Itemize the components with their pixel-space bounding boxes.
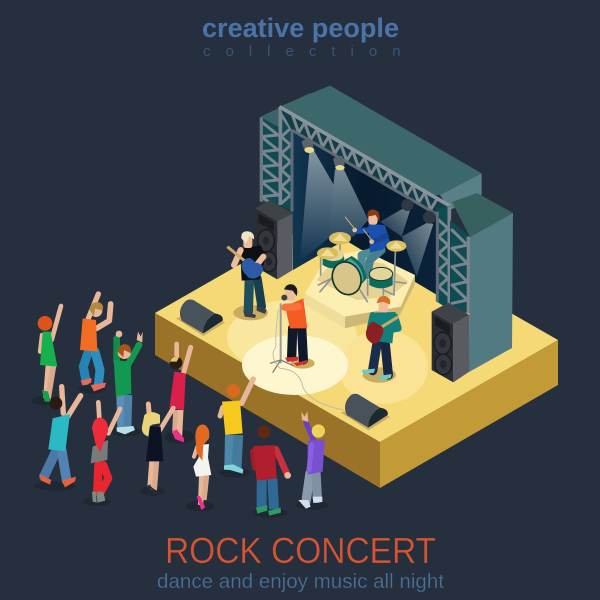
subtitle: dance and enjoy music all night [157,571,444,593]
speaker stack left [255,200,293,279]
dancer: white dress [186,425,214,511]
crowd back group [32,294,194,506]
roof block [279,86,482,210]
horizontal truss [279,107,450,214]
stage monitor right [341,394,390,430]
stage monitor left [176,299,225,336]
drum riser [305,250,415,328]
stage platform [155,211,558,488]
dancer: teal shirt [34,387,81,491]
dancer: green dress [32,306,61,405]
dancer: yellow shirt [219,379,253,477]
right side column [450,220,470,313]
drummer [345,210,390,275]
light beams [300,151,433,277]
backdrop wall [292,130,437,295]
back tower left [260,93,340,140]
heading: creative people collection: creative people [202,13,399,43]
dancer: red dress [164,344,194,443]
large speaker right [432,303,469,382]
dancer: black dress [140,404,173,496]
left back column [260,117,279,211]
singer with microphone [270,284,315,373]
heading: creative people collection [202,13,416,60]
cymbals [317,232,406,259]
stage spotlights [227,300,428,404]
left front column [279,107,293,212]
title: rock concert: ROCK CONCERT [165,530,436,571]
microphone cable [273,310,343,410]
dancer: purple sweater [296,411,328,510]
drum stands [318,243,406,302]
right tower [452,193,513,372]
crowd front group [186,379,328,518]
floor tom [369,267,393,288]
stage performers and monitors [176,231,469,430]
right guitarist [362,296,398,383]
right front column [437,206,450,310]
snare [323,249,344,268]
truss frame [260,107,470,313]
kick drum [327,256,367,299]
dancer: orange shirt [78,294,111,393]
dancer: red hair [83,402,120,506]
heading: creative people collection: collection [203,43,416,60]
riser and drum kit [305,210,415,328]
left guitarist [227,231,268,320]
dancer: green sweater [112,331,143,436]
dancer: red sweater [253,425,291,518]
spotlights [301,138,436,224]
